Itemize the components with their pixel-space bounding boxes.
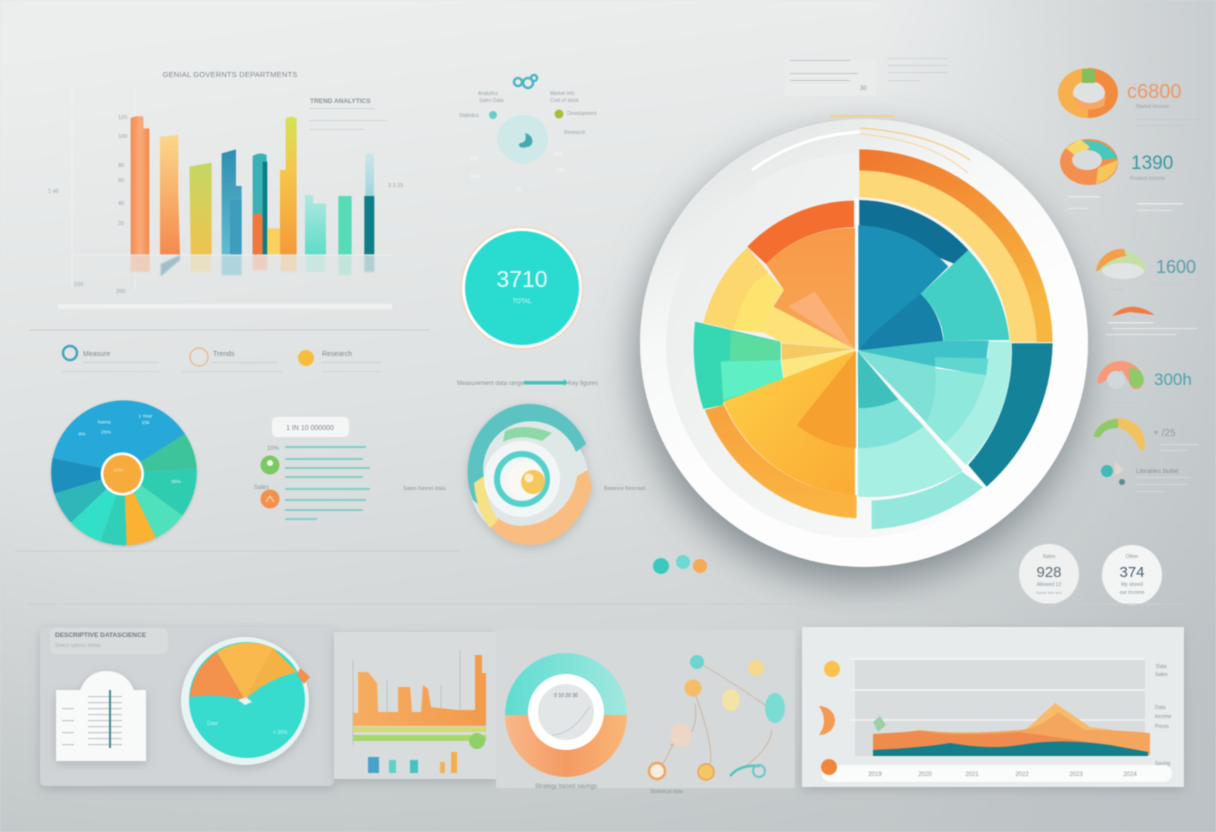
orange stacked chart — [353, 655, 486, 726]
right labels: Prices — [1155, 724, 1169, 730]
legend item 1: Measure — [83, 351, 110, 358]
caption — [1136, 104, 1201, 126]
green block front — [721, 360, 783, 401]
header note — [785, 58, 948, 96]
caption: Product Income — [1130, 176, 1165, 182]
stat: 6800 — [1058, 68, 1201, 126]
right outer orange ring — [859, 149, 1053, 342]
yolk — [521, 470, 545, 494]
teal slice — [857, 341, 989, 367]
blue pie chart — [51, 400, 197, 545]
gauge green — [1093, 419, 1118, 437]
left indicators — [819, 661, 886, 775]
bright aqua sector — [71, 473, 124, 541]
left red orange ring — [747, 201, 854, 264]
yellow inner — [764, 307, 855, 349]
chart axis frame — [72, 88, 392, 290]
white callouts: 25 — [516, 187, 522, 193]
center hub — [101, 452, 144, 496]
list labels — [254, 446, 280, 491]
area: peak — [1020, 703, 1150, 755]
axis labels: 100 — [118, 134, 127, 140]
gauge icon — [1097, 361, 1144, 389]
legend item 2: Trends — [213, 351, 235, 358]
stat circle: 928: Allowed 12 — [1037, 582, 1061, 588]
legend item 3: Research — [322, 351, 352, 358]
slice labels: Name — [98, 419, 111, 425]
cluster labels: Sales Data — [479, 98, 504, 104]
legend row — [62, 346, 382, 372]
pie gauge: + 35% — [273, 730, 288, 736]
slice labels: 25% — [101, 429, 112, 435]
outer teal arc — [468, 404, 586, 515]
teal icon — [1101, 462, 1125, 485]
blue sector — [858, 225, 948, 350]
pie gauge — [181, 637, 310, 765]
cluster labels: Cost of stock — [550, 98, 579, 104]
stat: 1390 — [1060, 139, 1196, 211]
heading: Libraries bullet — [1136, 468, 1178, 475]
donut — [505, 653, 627, 777]
timeline pill: 2022 — [1015, 772, 1029, 778]
list labels: 10% — [267, 446, 280, 452]
arrow with labels — [457, 379, 598, 387]
white callouts: 100 — [470, 156, 479, 162]
ring diagram — [468, 404, 592, 545]
plot area — [855, 660, 1145, 756]
slice labels — [78, 413, 182, 485]
network — [649, 655, 785, 795]
legend item 2 — [182, 348, 282, 372]
bars — [131, 116, 374, 254]
chart legend heading — [309, 98, 387, 130]
pie gauge: Data — [207, 721, 218, 727]
yellow arc — [474, 476, 498, 528]
panel: bottom left — [40, 627, 334, 786]
caption — [1108, 283, 1190, 290]
orange arc — [489, 470, 592, 545]
stat circle: 374: My stored — [1121, 582, 1143, 588]
axis labels: 3 2.25 — [388, 183, 403, 189]
white notes — [1068, 196, 1183, 211]
ring in aqua — [925, 368, 986, 443]
ring labels: Balance forecast — [604, 486, 645, 492]
slice labels: 8% — [78, 432, 86, 438]
stat circle: 374: our income — [1120, 590, 1145, 596]
KPI value: 3710 — [496, 266, 548, 292]
axis labels: 40 — [118, 201, 124, 207]
timeline pill: 2021 — [965, 772, 979, 778]
value: + /25 — [1153, 428, 1176, 439]
right labels: Data — [1155, 705, 1166, 711]
teal green sector — [124, 468, 197, 516]
axis labels: 200 — [116, 289, 125, 295]
disk inner shading — [666, 116, 1050, 538]
ring labels — [403, 486, 645, 492]
teal KPI circle — [461, 227, 583, 349]
list labels: Sales — [254, 485, 269, 491]
white callouts: 200 — [556, 168, 565, 174]
axis labels: 1 45 — [48, 189, 59, 195]
ring labels: Sales funnel data — [403, 486, 446, 492]
value: 300h — [1154, 370, 1192, 389]
dark blue sector — [51, 458, 124, 494]
lower aqua wedge — [857, 399, 924, 448]
panel: donut and network — [496, 630, 795, 795]
center sphere — [497, 115, 548, 164]
bar reflection — [131, 255, 374, 277]
stat circle: 928: 928 — [1036, 564, 1062, 581]
donut icon — [1060, 139, 1118, 185]
cluster labels: Analytics — [478, 91, 499, 97]
sphere glyph — [519, 133, 532, 148]
panel: bottom stacked bars — [334, 632, 496, 779]
stat: 1600 — [1096, 249, 1197, 335]
teal sector — [921, 250, 1009, 341]
card rows — [62, 696, 122, 745]
green arc — [503, 427, 552, 442]
donut: 0 10 20 30 — [554, 693, 578, 699]
cluster labels — [459, 91, 597, 136]
small gauge — [1112, 307, 1155, 316]
timeline pill — [822, 765, 1172, 782]
cluster labels: Market info — [550, 91, 575, 97]
chart legend heading: TREND ANALYTICS — [310, 98, 371, 105]
light green sector — [124, 473, 182, 538]
axis labels: 20 — [118, 221, 124, 227]
stat circle: 928: Sales — [1043, 554, 1056, 560]
right labels: Saving — [1155, 761, 1171, 767]
icon: green — [260, 456, 280, 474]
panel title: DESCRIPTIVE DATASCIENCE — [55, 632, 147, 639]
KPI caption: TOTAL — [513, 299, 532, 305]
stat circle: 928: Some info text — [1036, 590, 1063, 595]
green strips — [353, 727, 486, 749]
list lines — [285, 446, 370, 520]
notes — [1106, 322, 1197, 335]
timeline pill: 2024 — [1123, 772, 1137, 778]
arrow with labels: Measurement data range — [457, 381, 525, 387]
panel title — [50, 628, 168, 654]
caption: Market Income — [1136, 104, 1169, 110]
caption — [1105, 395, 1194, 403]
lower right aqua — [857, 351, 947, 443]
cluster labels: Statistics — [459, 113, 480, 119]
chart title: GENIAL GOVERNTS DEPARTMENTS — [163, 70, 297, 79]
axis labels: 100 — [74, 282, 83, 288]
bottom aqua strip — [872, 472, 983, 529]
right labels: Sales — [1155, 672, 1168, 678]
legend item 3 — [298, 350, 382, 372]
aqua sector — [100, 473, 127, 545]
timeline pill: 2019 — [868, 772, 882, 778]
right labels: Income — [1155, 714, 1172, 720]
green block back — [694, 322, 783, 409]
panel: bar chart — [48, 70, 403, 309]
white callouts: 50% — [470, 174, 481, 180]
card spine — [109, 690, 111, 748]
timeline pill: 2020 — [918, 772, 932, 778]
stat circle: 374: 374 — [1119, 564, 1145, 581]
area: teal — [873, 742, 1148, 756]
green block mid — [721, 332, 781, 362]
stat circle: 928 — [1019, 544, 1079, 604]
deep blue wedge — [858, 294, 944, 350]
network: Statistical data — [650, 789, 683, 795]
chart sectors — [694, 149, 1053, 529]
panel title: Select options below — [55, 643, 101, 649]
stat circle: 374: Other — [1126, 554, 1139, 560]
note: icon and text — [1101, 462, 1192, 492]
small bars — [368, 752, 457, 773]
slice labels: 15k — [142, 420, 150, 426]
pale slice — [935, 357, 988, 376]
grid lines — [850, 659, 1145, 720]
teal sector — [54, 473, 124, 523]
stat: 25 gauge — [1093, 418, 1198, 451]
lines — [1136, 477, 1192, 492]
cluster labels: Development — [567, 111, 597, 117]
value: 1600 — [1156, 257, 1196, 277]
arrow with labels: Key figures — [568, 381, 598, 387]
gauge icon — [1096, 249, 1146, 279]
dark blue ring — [859, 200, 968, 264]
header note: 30 — [860, 86, 867, 92]
area: orange — [873, 712, 1150, 755]
right dark teal ring — [968, 343, 1053, 487]
right labels: Data — [1156, 664, 1167, 670]
right labels — [1155, 664, 1172, 767]
list block — [254, 417, 370, 520]
donut caption: Strategy based savings — [535, 784, 597, 790]
list heading pill: 1 IN 10 000000 — [286, 425, 334, 432]
white divider — [907, 403, 985, 488]
green sector — [124, 434, 197, 473]
panel: area chart — [802, 627, 1184, 787]
value: 1390 — [1131, 153, 1173, 174]
value: c6800 — [1127, 81, 1182, 103]
white callouts: 400 — [554, 152, 563, 158]
main radial chart — [640, 116, 1088, 567]
axis labels: 60 — [118, 178, 124, 184]
stat: 300 — [1097, 361, 1194, 403]
donut icon — [1058, 68, 1118, 118]
legend item 1 — [62, 346, 160, 372]
orange wedge highlight — [788, 292, 855, 349]
center teal wedge — [857, 351, 898, 409]
caption — [1160, 444, 1198, 451]
light aqua ring — [945, 342, 1011, 465]
cluster icon — [514, 75, 537, 88]
right yellow ring — [859, 171, 1037, 342]
slice labels: 1 Year — [138, 413, 153, 419]
white callouts — [470, 152, 565, 193]
cluster labels: Research — [564, 130, 586, 136]
yellow orange big sector — [723, 351, 855, 495]
yellow mid ring — [734, 273, 784, 333]
document card — [56, 671, 146, 761]
gauge icon — [1093, 418, 1145, 450]
teal inner ring — [497, 454, 547, 504]
orange sector — [124, 473, 156, 545]
area: deep orange — [873, 731, 1148, 755]
cluster dots — [489, 110, 564, 119]
thin guide lines — [353, 650, 460, 745]
divider lines — [15, 330, 1184, 604]
panel: radial icon cluster — [459, 75, 597, 193]
slice labels: 10% — [113, 468, 124, 474]
inner orange wedge — [797, 351, 856, 448]
white inner disk — [484, 441, 560, 517]
icon: orange — [260, 490, 280, 508]
axis labels — [48, 115, 403, 295]
stat circle: 374 — [1102, 545, 1162, 605]
baseline — [58, 304, 392, 309]
timeline pill: 2023 — [1069, 772, 1083, 778]
orange outer ring left — [705, 405, 857, 518]
axis labels: 80 — [118, 163, 124, 169]
bottom aqua wedge — [857, 427, 963, 497]
small dots — [653, 555, 707, 574]
light blue sector — [53, 400, 185, 473]
yellow outer ring — [703, 247, 768, 330]
slice labels: 30% — [171, 479, 182, 485]
axis labels: 120 — [118, 115, 127, 121]
left orange sector — [766, 228, 855, 349]
white disk — [640, 119, 1088, 567]
